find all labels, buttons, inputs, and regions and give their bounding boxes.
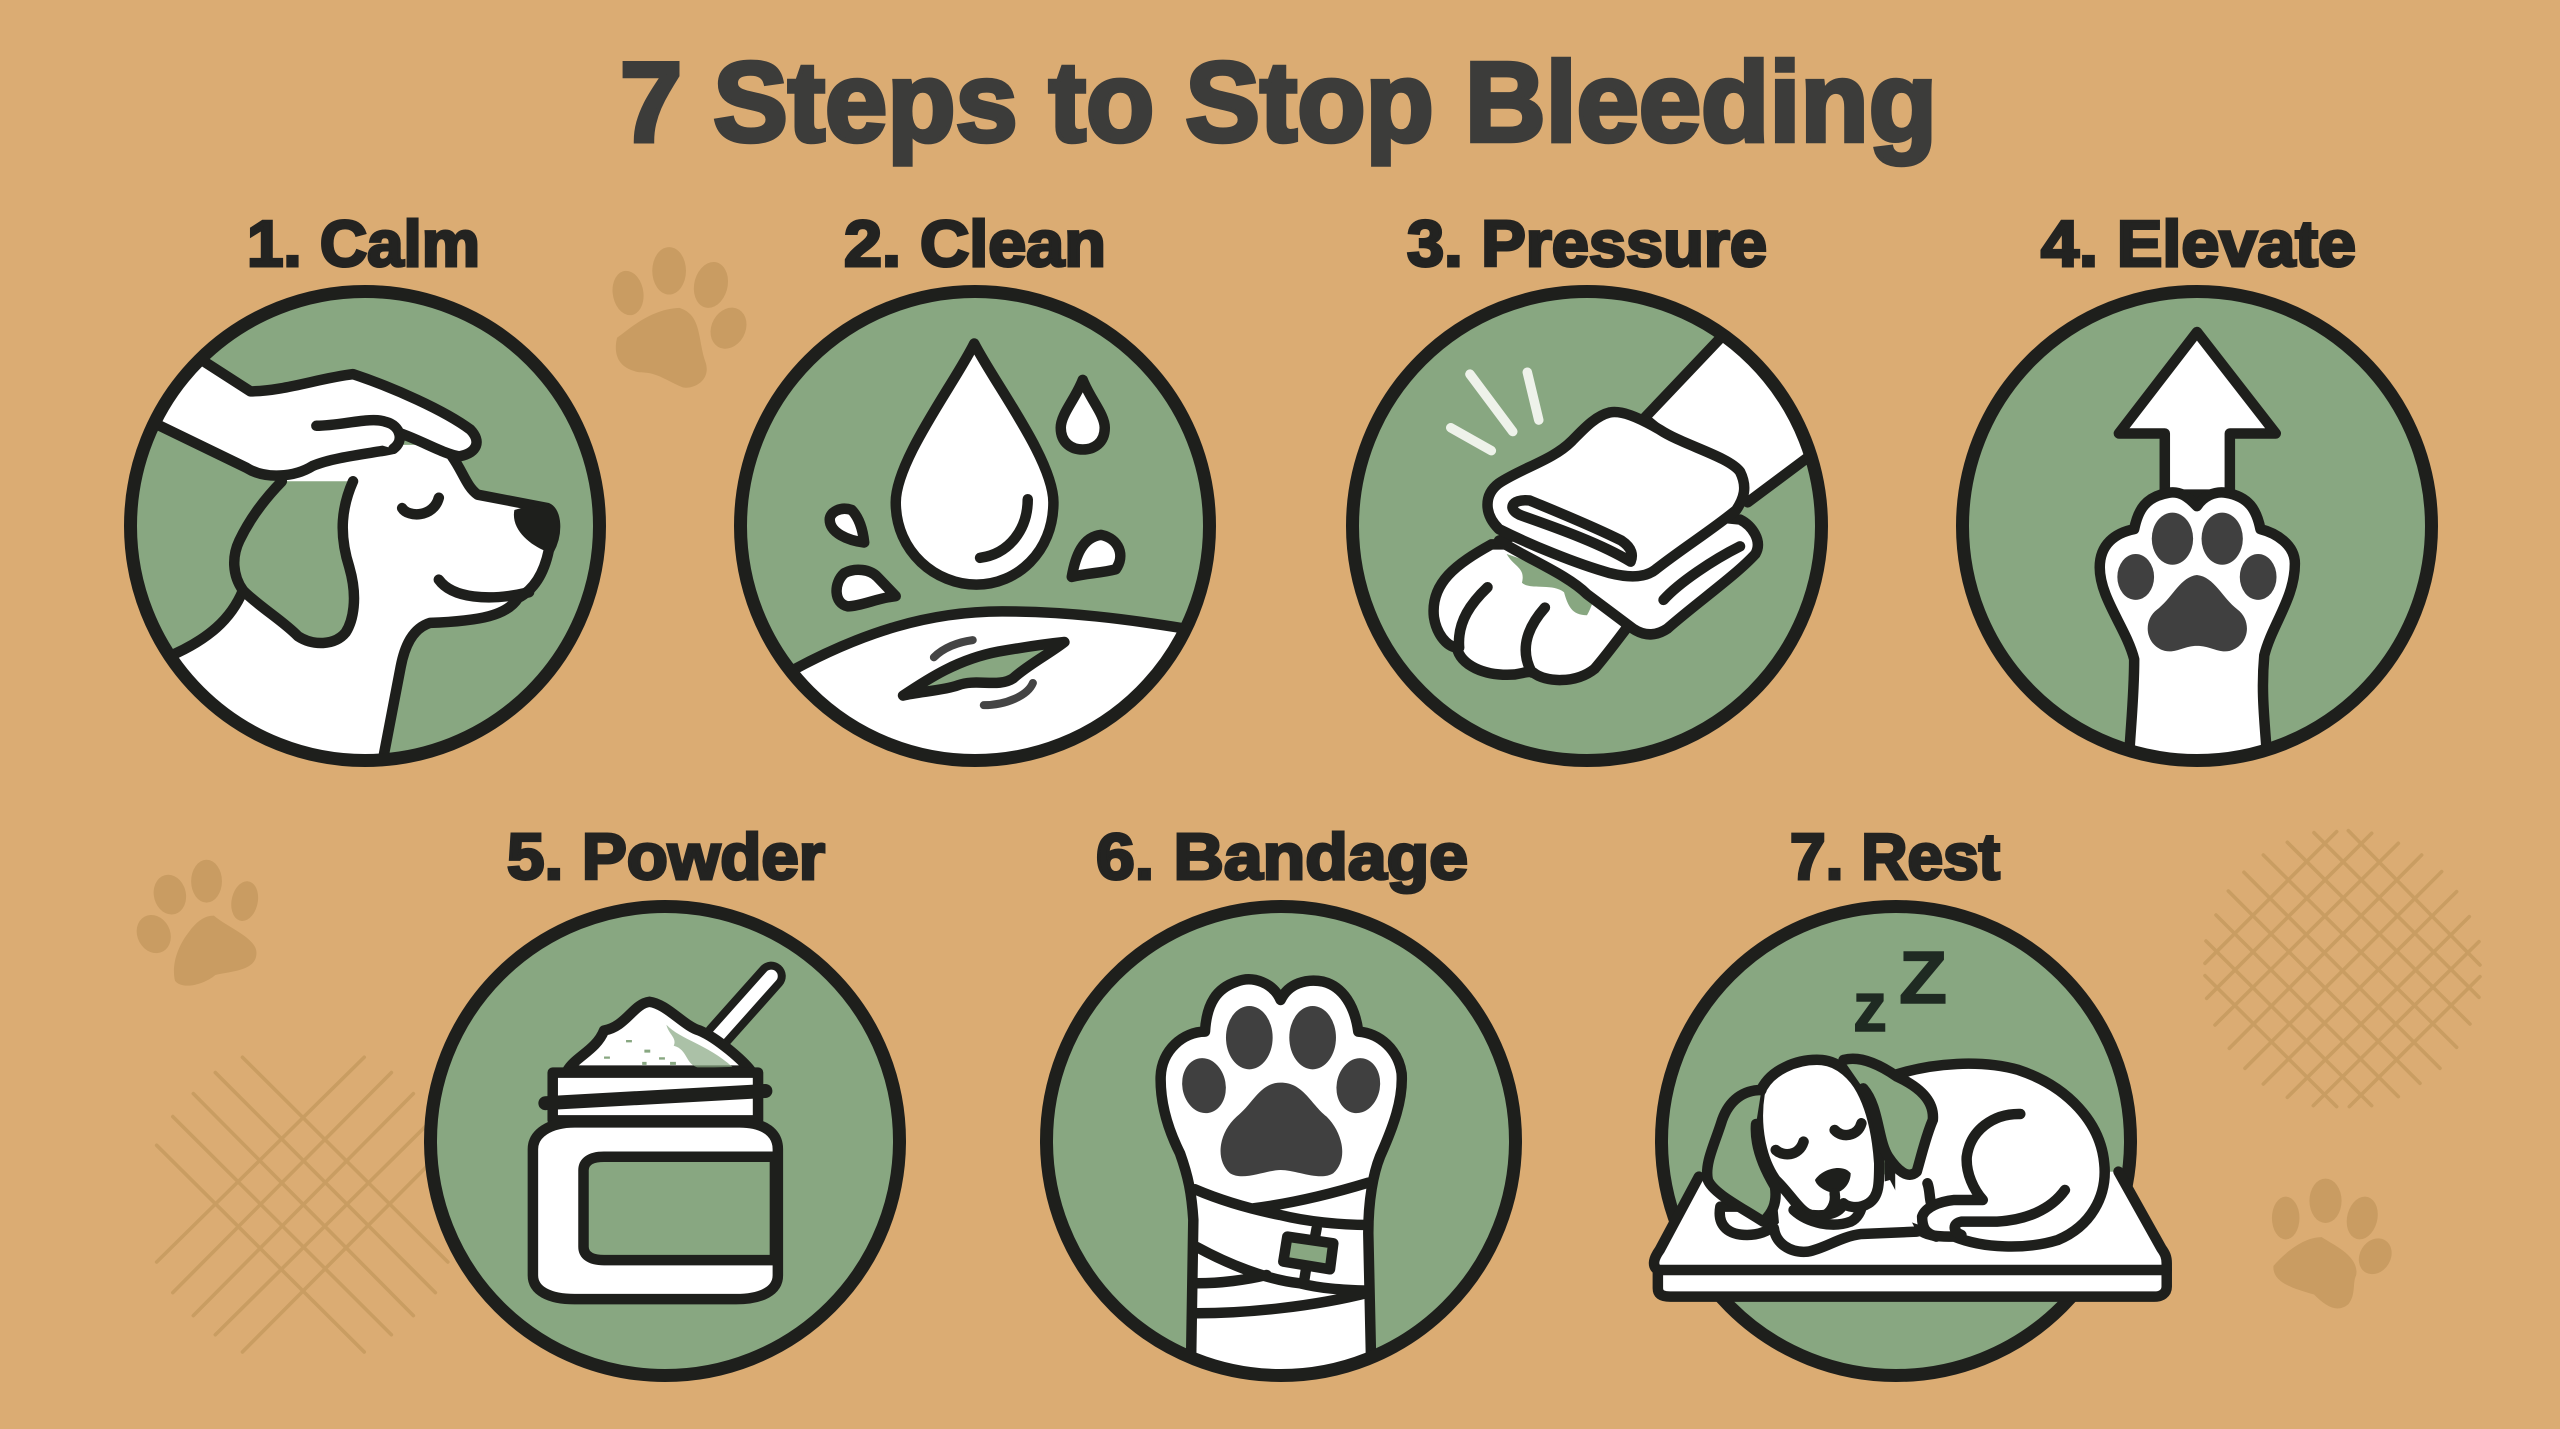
panel: step 4 elevate	[1962, 207, 2432, 774]
heading: 5. Powder: 5. Powder	[507, 820, 825, 893]
panel: step 5 powder	[430, 820, 900, 1376]
background paw print top	[610, 247, 750, 388]
icon: raised paw with up arrow	[1962, 291, 2432, 774]
heading: 2. Clean: 2. Clean	[844, 207, 1106, 280]
heading: 3. Pressure: 3. Pressure	[1407, 207, 1767, 280]
background paw print right	[2272, 1179, 2395, 1308]
heading: 7. Rest: 7. Rest	[1790, 820, 2000, 893]
icon: hand pressing towel on paw	[1352, 291, 1822, 761]
heading: 4. Elevate: 4. Elevate	[2041, 207, 2356, 280]
icon: hand petting dog	[115, 291, 600, 770]
background lattice left	[157, 1057, 448, 1352]
icon: sleeping dog on bed: Z	[1899, 936, 1947, 1019]
icon: jar of styptic powder with scoop	[430, 906, 900, 1376]
background paw print left	[134, 860, 261, 986]
panel: step 3 pressure	[1352, 207, 1822, 761]
panel: step 7 rest	[1654, 820, 2167, 1376]
title: 7 Steps to Stop Bleeding	[620, 39, 1937, 165]
icon: sleeping dog on bed: z	[1853, 968, 1887, 1046]
icon: sleeping dog on bed	[1654, 906, 2167, 1376]
heading: 6. Bandage: 6. Bandage	[1096, 820, 1468, 893]
panel: step 6 bandage	[1046, 820, 1516, 1387]
heading: 1. Calm: 1. Calm	[247, 207, 480, 280]
panel: step 1 calm	[115, 207, 600, 770]
background lattice right	[2205, 831, 2480, 1107]
icon: water drops over wound	[740, 291, 1229, 782]
icon: bandaged paw	[1046, 906, 1516, 1387]
panel: step 2 clean	[740, 207, 1229, 782]
